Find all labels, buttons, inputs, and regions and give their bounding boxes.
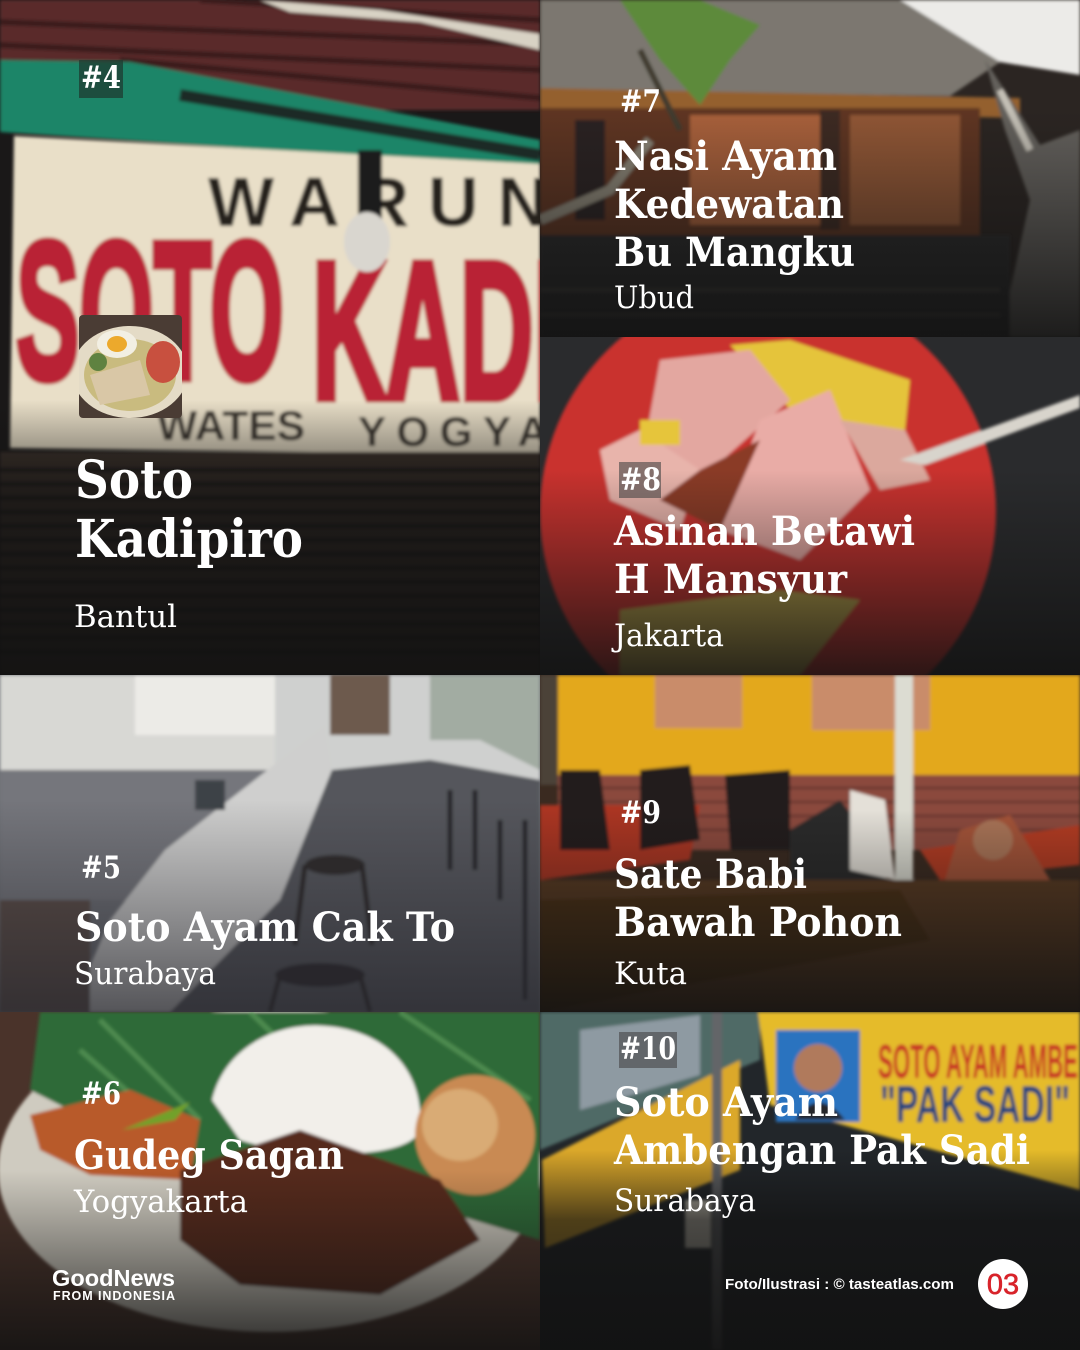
heading: Gudeg Sagan [74, 1132, 344, 1179]
location: Surabaya [74, 956, 216, 992]
panel: #6 Gudeg Sagan [0, 1008, 542, 1350]
thumbnail: soto bowl [79, 315, 182, 418]
heading: Bawah Pohon [614, 899, 902, 946]
location: Kuta [614, 956, 687, 992]
photo: warung roof and sign [0, 0, 540, 549]
panel: #9 Sate Babi Bawah Pohon [540, 675, 1080, 1012]
photo: warung roof and sign: KADI [312, 222, 562, 440]
photo: gudeg plate [0, 1008, 542, 1332]
heading: H Mansyur [614, 556, 848, 603]
heading [613, 508, 915, 603]
photo: yellow street sign [540, 1012, 1080, 1350]
heading [77, 458, 302, 568]
photo: warung roof and sign: SOTO [16, 202, 284, 420]
heading: Sate Babi [614, 851, 807, 898]
photo: Balinese pavilion [540, 0, 1080, 337]
heading: Nasi Ayam [614, 133, 837, 180]
number tag: #4 [81, 60, 121, 96]
photo credit: Foto/Ilustrasi : © tasteatlas.com [725, 1276, 954, 1293]
photo: long counter room [0, 675, 540, 1012]
location: Bantul [74, 599, 177, 635]
logo: GoodNews from Indonesia: FROM INDONESIA [53, 1289, 175, 1303]
panel: #4 Soto Kadipiro [0, 0, 540, 628]
heading: Soto Ayam [614, 1079, 838, 1126]
number tag: #6 [81, 1076, 121, 1112]
number tag: #9 [620, 795, 661, 831]
location: Jakarta [611, 618, 724, 654]
location: Ubud [614, 280, 694, 316]
panel: #5 Soto Ayam Cak To [0, 675, 540, 1012]
location: Surabaya [614, 1183, 756, 1219]
location: Yogyakarta [73, 1184, 248, 1220]
photo: warung roof and sign: WARUN [208, 163, 548, 241]
page number badge [978, 1259, 1028, 1309]
heading: Asinan Betawi [613, 508, 915, 555]
number tag: #7 [620, 84, 661, 120]
photo: red plate with crackers [540, 337, 1080, 675]
heading: Kedewatan [614, 181, 844, 228]
number tag: #10 [620, 1031, 676, 1067]
heading [613, 1079, 1030, 1174]
logo: GoodNews from Indonesia [52, 1269, 175, 1300]
heading: Soto Ayam Cak To [75, 904, 455, 951]
photo: restaurant with yellow wall [540, 675, 1080, 1012]
logo: GoodNews from Indonesia: GoodNews [52, 1265, 175, 1291]
photo: warung roof and sign: WATES [157, 402, 305, 449]
panel: #8 Asinan Betawi H Mansyur [540, 337, 1080, 675]
panel: #10 Soto Ayam Ambengan Pak Sadi [540, 1012, 1080, 1350]
heading: Kadipiro [75, 509, 303, 570]
heading: Soto [75, 450, 193, 511]
heading: Bu Mangku [614, 229, 855, 276]
heading [616, 858, 902, 936]
number tag: #8 [620, 462, 661, 498]
number tag: #5 [81, 850, 121, 886]
panel: #7 Nasi Ayam Kedewatan Bu Mangku [540, 0, 1080, 337]
photo: warung roof and sign: YOGYA [358, 408, 548, 455]
page number badge: 03 [987, 1269, 1019, 1301]
heading [614, 133, 855, 276]
heading: Ambengan Pak Sadi [613, 1127, 1030, 1174]
